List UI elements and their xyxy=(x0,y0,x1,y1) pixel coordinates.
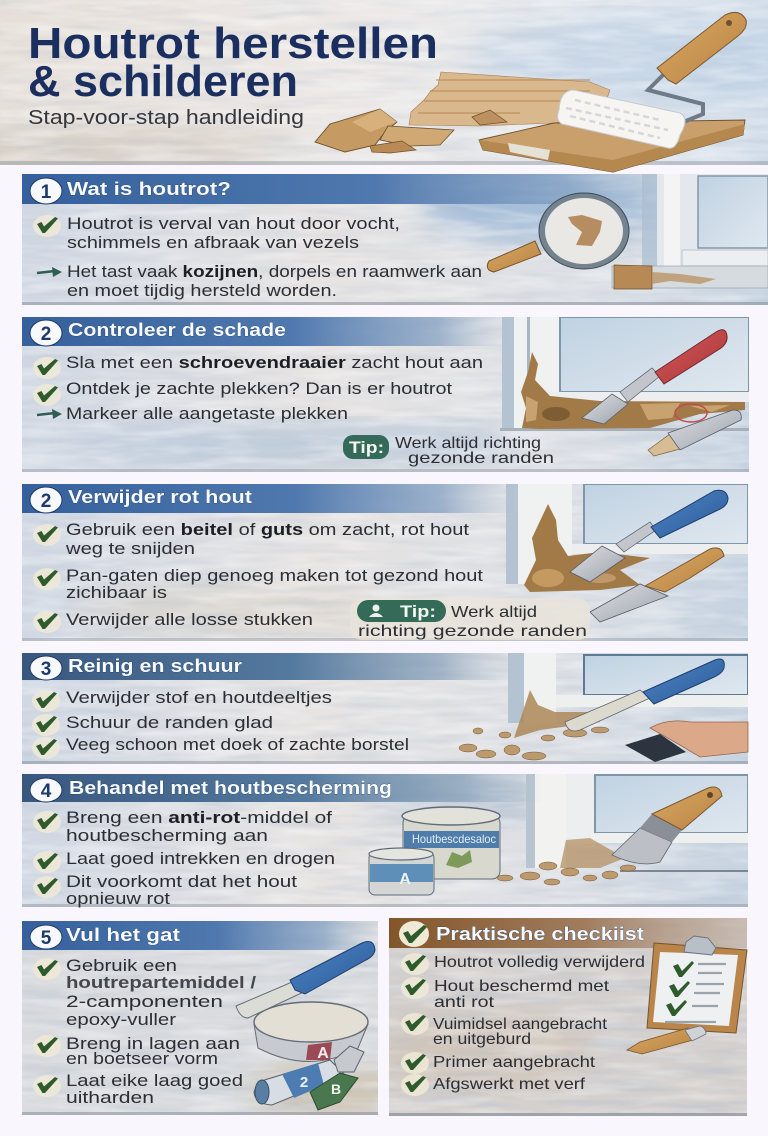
icon: wood scraper xyxy=(590,548,724,622)
icon: paint brush xyxy=(612,787,722,864)
panel 6: Vul het gat xyxy=(22,921,410,1115)
item: en boetseer vorm xyxy=(66,1049,218,1068)
item: Breng een anti-rot -middel of xyxy=(66,808,332,827)
icon: small can A: A xyxy=(399,871,411,888)
panel 1: Wat is houtrot xyxy=(22,167,768,305)
icon: red screwdriver xyxy=(582,330,727,424)
number badge xyxy=(30,656,62,680)
item: Ontdek je zachte plekken? Dan is er houtrot xyxy=(66,379,452,398)
item: houtbescherming aan xyxy=(66,826,268,845)
number badge xyxy=(30,925,62,949)
item xyxy=(32,688,332,712)
icon: pencil xyxy=(627,1026,706,1054)
item: uitharden xyxy=(66,1088,154,1107)
item: Houtrot is verval van hout door vocht, xyxy=(67,214,400,233)
number badge: 5 xyxy=(41,928,52,949)
bar xyxy=(22,653,517,680)
item: 2-camponenten xyxy=(66,992,223,1011)
panel 3: Verwijder rot hout xyxy=(22,484,748,641)
number badge: 2 xyxy=(41,491,51,512)
header panel xyxy=(0,0,768,172)
heading: Controleer de schade xyxy=(68,320,286,340)
item: Dit voorkomt dat het hout xyxy=(66,872,297,891)
heading: Reinig en schuur xyxy=(68,656,242,676)
icon: large can: Houtbescdesaloc xyxy=(412,832,496,846)
item: Verwijder alle losse stukken xyxy=(66,610,313,629)
window frame with rot xyxy=(506,484,748,592)
item xyxy=(32,735,409,759)
number badge xyxy=(30,487,62,513)
icon: marker pen xyxy=(648,404,741,456)
item xyxy=(32,713,273,736)
illustration: rotten wood and paint roller xyxy=(315,12,746,172)
title xyxy=(28,19,438,106)
item xyxy=(33,872,297,908)
window frame with rot xyxy=(500,317,749,431)
panel 5: Behandel met houtbescherming xyxy=(22,774,748,908)
item: Houtrot volledig verwijderd xyxy=(434,954,645,971)
item: houtrepartemiddel / xyxy=(66,973,256,992)
item xyxy=(401,953,645,975)
item: weg te snijden xyxy=(65,539,195,558)
item: Vuimidsel aangebracht xyxy=(433,1016,608,1033)
item: Verwijder stof en houtdeeltjes xyxy=(66,688,332,707)
item xyxy=(33,379,452,406)
item xyxy=(33,520,469,558)
panel 2: Controleer de schade xyxy=(22,317,749,472)
icon: tubes: B xyxy=(331,1081,341,1097)
item xyxy=(401,1074,586,1096)
item: Markeer alle aangetaste plekken xyxy=(66,404,348,423)
item: Laat eike laag goed xyxy=(66,1071,243,1090)
item: Primer aangebracht xyxy=(433,1054,596,1071)
panel 7: Praktische checklist xyxy=(370,918,747,1116)
bar xyxy=(22,774,542,802)
window frame xyxy=(508,653,748,738)
window frame xyxy=(526,774,748,872)
heading: Praktische checkiist xyxy=(436,924,644,944)
debris xyxy=(497,838,636,885)
item: Laat goed intrekken en drogen xyxy=(66,849,335,868)
panel 4: Reinig en schuur xyxy=(22,653,748,764)
tip callout xyxy=(343,435,554,467)
item: Veeg schoon met doek of zachte borstel xyxy=(66,735,409,754)
heading: Verwijder rot hout xyxy=(68,487,252,507)
icon: small can A xyxy=(369,848,434,895)
bar xyxy=(22,317,512,346)
item xyxy=(33,956,256,1029)
heading: Vul het gat xyxy=(66,925,180,945)
item: en moet tijdig hersteld worden. xyxy=(67,281,337,300)
item xyxy=(33,566,483,602)
icon: putty knife xyxy=(236,942,375,1018)
item: zichibaar is xyxy=(66,583,167,602)
number badge xyxy=(30,320,62,346)
number badge xyxy=(30,778,62,802)
item: Schuur de randen glad xyxy=(66,713,273,732)
bar xyxy=(22,921,378,950)
icon: blue chisel xyxy=(570,490,728,582)
item: Gebruik een xyxy=(66,956,177,975)
number badge: 4 xyxy=(41,781,52,802)
item: opnieuw rot xyxy=(66,889,170,908)
item xyxy=(33,808,332,845)
heading: Behandel met houtbescherming xyxy=(69,778,392,798)
tip callout: Werk altijd richting xyxy=(395,435,541,452)
icon: clipboard xyxy=(647,936,747,1033)
item xyxy=(33,353,483,379)
subtitle: Stap-voor-stap handleiding xyxy=(28,107,304,129)
icon: tubes xyxy=(254,1046,364,1110)
heading check xyxy=(399,921,429,947)
tip callout: Werk altijd xyxy=(451,604,537,621)
bar xyxy=(22,484,517,513)
tip callout: Tip: xyxy=(349,438,384,457)
item: anti rot xyxy=(434,994,495,1011)
icon: blue brush xyxy=(565,659,724,731)
number badge: 2 xyxy=(41,324,51,345)
item xyxy=(401,1052,596,1074)
item: schimmels en afbraak van vezels xyxy=(67,233,359,252)
tip callout xyxy=(350,598,590,640)
item: Hout beschermd met xyxy=(434,978,610,995)
item: en uitgeburd xyxy=(433,1031,531,1048)
item xyxy=(401,977,610,1011)
tip callout: gezonde randen xyxy=(408,450,554,467)
item xyxy=(33,849,335,873)
item xyxy=(37,262,482,300)
item xyxy=(33,1034,240,1068)
number badge: 3 xyxy=(41,659,51,680)
icon: magnifying glass xyxy=(487,193,629,272)
item xyxy=(33,610,313,633)
icon: filler tub: A xyxy=(317,1045,329,1062)
tip callout: Tip: xyxy=(400,602,436,621)
item: Sla met een schroevendraaier zacht hout aan xyxy=(66,353,483,372)
item: Het tast vaak kozijnen , dorpels en raamwerk aan xyxy=(67,262,482,281)
title: Houtrot herstellen xyxy=(28,19,438,68)
item: Breng in lagen aan xyxy=(66,1034,240,1053)
item xyxy=(33,214,400,252)
number badge: 1 xyxy=(41,182,52,203)
bar xyxy=(389,918,747,948)
item xyxy=(33,1071,243,1107)
heading: Wat is houtrot? xyxy=(67,179,231,199)
number badge xyxy=(30,178,62,204)
window frame xyxy=(612,174,768,289)
item: Afgswerkt met verf xyxy=(433,1076,586,1093)
item: Gebruik een beitel of guts om zacht, rot hout xyxy=(66,520,469,539)
debris xyxy=(459,727,609,760)
icon: hand with sanding block xyxy=(625,721,748,762)
tip callout: richting gezonde randen xyxy=(358,623,587,640)
icon: filler tub xyxy=(254,1002,368,1062)
item: epoxy-vuller xyxy=(66,1010,176,1029)
bar xyxy=(22,174,662,204)
item: Pan-gaten diep genoeg maken tot gezond hout xyxy=(66,566,483,585)
item xyxy=(401,1013,608,1048)
title: & schilderen xyxy=(28,57,298,106)
icon: tubes: 2 xyxy=(300,1074,308,1091)
icon: large can xyxy=(402,807,500,879)
